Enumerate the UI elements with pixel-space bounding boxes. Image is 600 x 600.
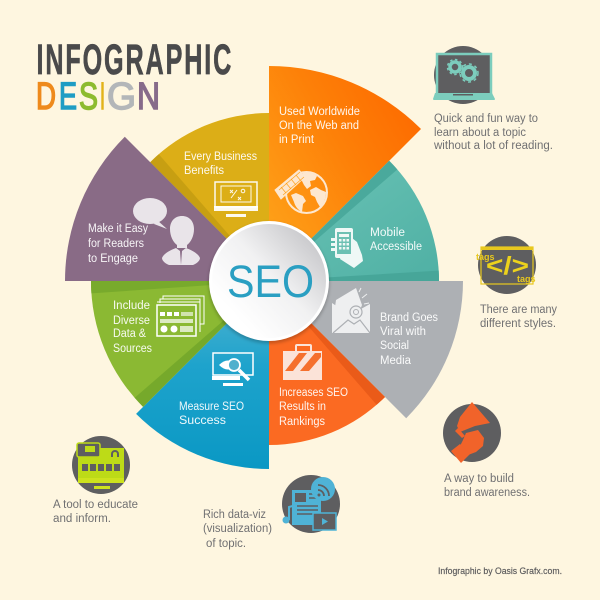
callout: rich data viz xyxy=(203,475,340,550)
center badge xyxy=(208,221,330,344)
icon: strategy monitor xyxy=(214,182,258,217)
panel: increases seo results: Increases SEO xyxy=(279,387,348,399)
callout: educate and inform: A tool to educate xyxy=(53,499,138,511)
title line: Design: I xyxy=(100,76,105,118)
callout: quick and fun xyxy=(433,46,553,152)
panel: every business benefits: Every Business xyxy=(184,151,257,163)
panel: mobile accessible: Mobile xyxy=(370,227,405,239)
panel: measure seo success: Measure SEO xyxy=(179,401,244,413)
panel: used worldwide: Used Worldwide xyxy=(279,106,360,118)
callout: quick and fun: learn about a topic xyxy=(434,127,526,139)
icon: phone in hand xyxy=(331,228,363,268)
panel: brand goes viral: Media xyxy=(380,355,412,367)
title xyxy=(36,36,233,118)
icon: envelope and megaphone xyxy=(332,288,370,333)
icon: satellite and globe xyxy=(275,170,327,213)
panel: include diverse data xyxy=(91,281,269,407)
panel: make it easy for readers: Make it Easy xyxy=(88,223,148,235)
icon: monitor with magnifier xyxy=(212,353,253,386)
title line: Design: S xyxy=(79,76,98,118)
callout: many different styles xyxy=(476,236,557,330)
icon: laptop with gears xyxy=(433,46,495,104)
panel: brand goes viral: Viral with xyxy=(380,326,426,338)
panel: increases seo results: Results in xyxy=(279,401,326,413)
panel: make it easy for readers: for Readers xyxy=(88,238,144,250)
panel: make it easy for readers: to Engage xyxy=(88,253,138,265)
panel: used worldwide: in Print xyxy=(279,134,315,146)
credit line: Infographic by Oasis Grafx.com. xyxy=(438,566,562,577)
title line: Design xyxy=(36,76,160,118)
panel: include diverse data: Diverse xyxy=(113,315,150,327)
panel: measure seo success xyxy=(136,281,269,469)
panel: used worldwide: On the Web and xyxy=(279,120,359,132)
callout: brand awareness: A way to build xyxy=(444,473,514,485)
title line: Infographic: INFOGRAPHIC xyxy=(36,36,233,84)
panel: mobile accessible xyxy=(269,161,439,281)
callout: brand awareness xyxy=(443,402,530,499)
callout: rich data viz: (visualization) xyxy=(203,523,272,535)
icon: code tags: tags xyxy=(517,274,536,284)
panel: include diverse data: Include xyxy=(113,300,150,312)
title line: Design: E xyxy=(59,76,77,118)
icon: person with speech bubble xyxy=(133,198,200,265)
panel: brand goes viral: Social xyxy=(380,340,409,352)
panel: increases seo results xyxy=(269,281,385,445)
icon: lime monitor xyxy=(72,436,130,494)
panel: measure seo success: Success xyxy=(179,415,226,427)
icon: briefcase xyxy=(283,344,322,380)
callout: brand awareness: brand awareness. xyxy=(444,487,530,499)
panel: include diverse data: Data & xyxy=(113,328,146,340)
seo label: SEO xyxy=(227,256,314,307)
callout: rich data viz: Rich data-viz xyxy=(203,509,266,521)
icon: megaphone in hand xyxy=(443,402,501,463)
icon: code tags: tags xyxy=(476,252,495,262)
panel: every business benefits xyxy=(150,113,269,281)
callout: quick and fun: Quick and fun way to xyxy=(434,113,538,125)
icon: media and rss xyxy=(282,475,340,533)
title line: Design: N xyxy=(137,76,160,118)
panel: used worldwide xyxy=(269,66,421,281)
callout: many different styles: different styles. xyxy=(480,318,556,330)
icon: code tags: </> xyxy=(486,252,529,280)
panel: mobile accessible: Accessible xyxy=(370,241,422,253)
title line: Design: G xyxy=(107,76,136,118)
icon: stacked data sheets xyxy=(157,296,204,336)
panel: brand goes viral xyxy=(269,281,463,418)
callout: many different styles: There are many xyxy=(480,304,557,316)
panel: include diverse data: Sources xyxy=(113,343,152,355)
panel: every business benefits: Benefits xyxy=(184,165,224,177)
callout: rich data viz: of topic. xyxy=(206,538,246,550)
callout: quick and fun: without a lot of reading. xyxy=(433,140,553,152)
callout: educate and inform xyxy=(53,436,138,525)
panel: make it easy for readers xyxy=(65,137,269,281)
icon: code tags xyxy=(476,236,536,294)
panel: increases seo results: Rankings xyxy=(279,416,325,428)
title line: Design: D xyxy=(36,76,56,118)
panel: brand goes viral: Brand Goes xyxy=(380,312,438,324)
callout: educate and inform: and inform. xyxy=(53,513,111,525)
